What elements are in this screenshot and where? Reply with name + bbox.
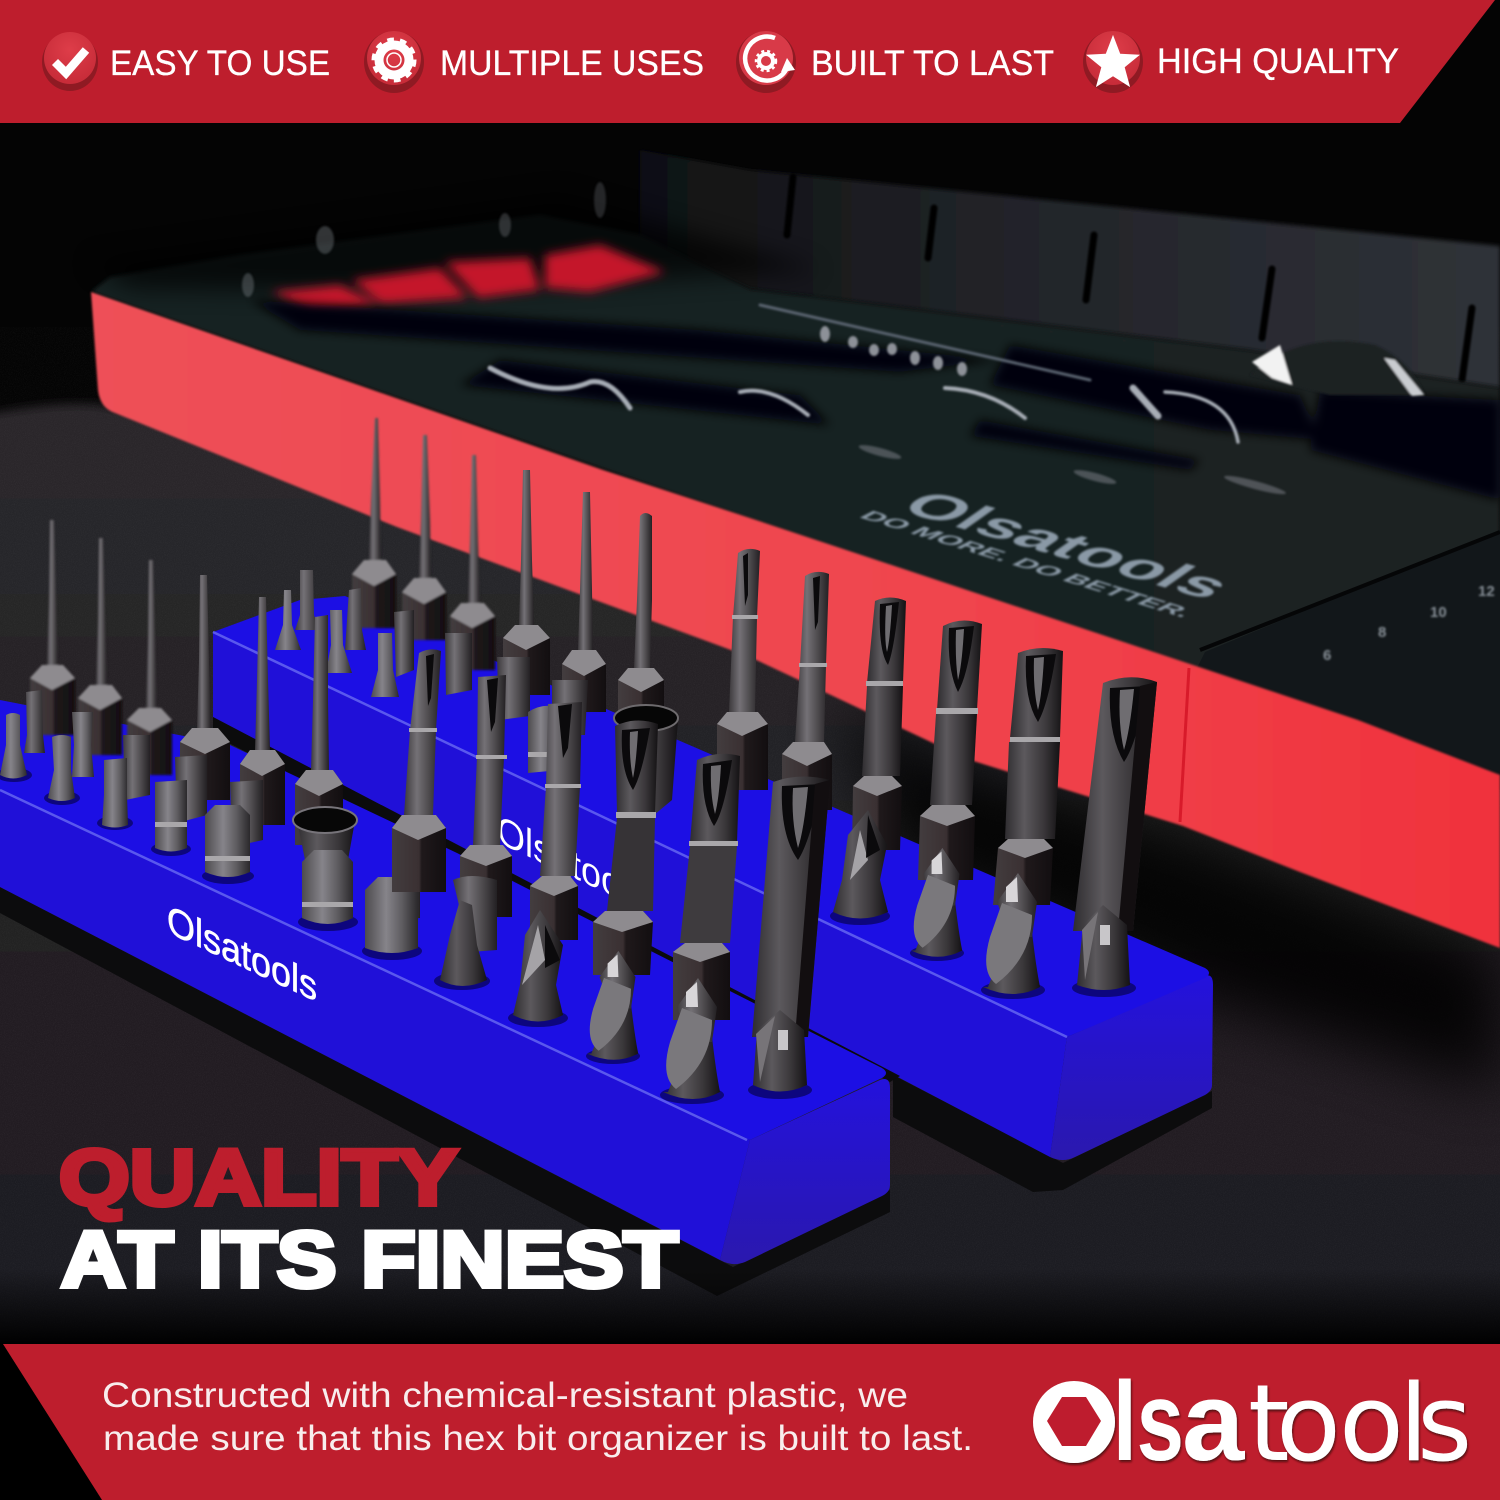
description text xyxy=(102,1376,973,1458)
back holder end face xyxy=(1050,975,1213,1160)
bottom fade over floor xyxy=(0,1270,1500,1346)
front holder: tall driver bits xyxy=(30,520,343,845)
back torx bits xyxy=(717,549,1157,931)
front holder long face xyxy=(0,790,750,1260)
fabric floor xyxy=(0,404,1500,1500)
brand logo: O xyxy=(1031,1360,1118,1485)
icon: check mark xyxy=(42,32,98,91)
headline xyxy=(59,1132,678,1304)
tool case: black foam tray xyxy=(90,182,1500,790)
shadow along foam strip xyxy=(840,705,1500,1090)
lens glare xyxy=(1250,341,1425,396)
front socket xyxy=(293,807,357,860)
front holder end face xyxy=(720,1079,890,1264)
feature: multiple uses xyxy=(364,31,704,93)
socket sizes dots xyxy=(242,182,1287,497)
back holder: tall torx and driver bits xyxy=(352,418,1157,931)
back holder: front row bits xyxy=(830,810,1136,999)
description text: made sure that this hex bit organizer is built to last. xyxy=(103,1419,973,1458)
back holder logo: Olsatools xyxy=(497,806,647,920)
foam socket size numbers xyxy=(1323,583,1495,664)
foam socket size numbers: 8 xyxy=(1378,624,1386,641)
bottom banner xyxy=(3,1344,1500,1500)
brand logo: tools xyxy=(1248,1362,1472,1485)
red foam strip xyxy=(91,292,1500,948)
back holder top surface xyxy=(213,596,1209,1037)
foam socket size numbers: 12 xyxy=(1478,583,1495,600)
front holder base xyxy=(0,887,890,1296)
feature: easy to use: EASY TO USE xyxy=(110,44,330,83)
foam socket size numbers: 6 xyxy=(1323,647,1331,664)
feature: high quality: HIGH QUALITY xyxy=(1157,42,1399,81)
headline: at its finest: AT ITS FINEST xyxy=(61,1214,678,1304)
headline: quality: QUALITY xyxy=(59,1132,458,1222)
tool case: lid hinge xyxy=(640,150,1500,388)
front holder: tall torx bits xyxy=(392,649,830,1037)
feature: built to last: BUILT TO LAST xyxy=(811,44,1054,83)
icon: star xyxy=(1083,31,1143,93)
feature: high quality xyxy=(1083,31,1399,93)
chrome tool highlights xyxy=(490,305,1238,442)
icon: rotating gear arrow xyxy=(736,31,796,93)
front holder: small bits row xyxy=(0,690,422,960)
brand logo: a xyxy=(1182,1359,1245,1484)
brand logo xyxy=(1031,1359,1472,1485)
front holder logo: Olsatools xyxy=(167,896,317,1010)
feature: easy to use xyxy=(42,32,330,91)
description text: Constructed with chemical-resistant plastic, we xyxy=(102,1376,908,1415)
front blue holder xyxy=(0,700,890,1296)
printed logo on foam: DO MORE. DO BETTER. xyxy=(853,509,1200,620)
feature: multiple uses: MULTIPLE USES xyxy=(440,44,704,83)
back holder long face xyxy=(213,632,1067,1157)
brand logo: ls xyxy=(1113,1359,1184,1484)
gap between holders xyxy=(213,717,900,1082)
back holder: small rear bits xyxy=(275,570,678,815)
back socket xyxy=(614,705,678,815)
icon: gear xyxy=(364,31,424,93)
foam socket size numbers: 10 xyxy=(1430,604,1447,621)
back blue holder xyxy=(213,596,1213,1192)
red foam tool cutouts xyxy=(272,245,665,312)
printed logo on foam: Olsatools xyxy=(889,484,1245,606)
front holder top surface xyxy=(0,700,886,1140)
back holder base xyxy=(893,1075,1212,1192)
top banner xyxy=(0,0,1495,123)
front holder: front row bits xyxy=(434,876,812,1104)
feature: built to last xyxy=(736,31,1054,93)
blurred tool grooves xyxy=(250,300,1500,500)
